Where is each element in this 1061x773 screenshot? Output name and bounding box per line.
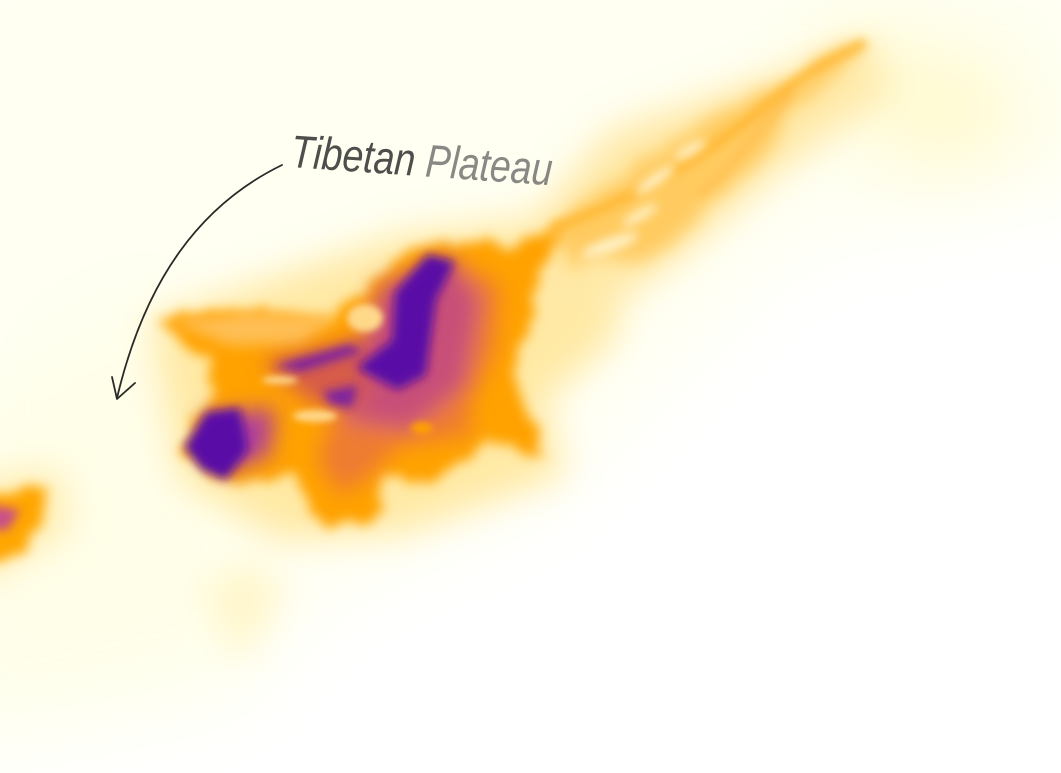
purple high peaks xyxy=(184,254,455,480)
magenta interior highlands xyxy=(205,256,500,495)
western outlying massif xyxy=(0,482,50,570)
lighter orange north-western slopes xyxy=(170,312,340,345)
north-eastern ridge band xyxy=(555,42,865,270)
light valleys inside the north-eastern ridge xyxy=(579,137,708,262)
orange plateau body xyxy=(155,212,585,530)
arrow pointing to plateau xyxy=(112,165,282,399)
pale basins in the western plateau xyxy=(262,304,433,434)
sharp ridge line xyxy=(555,44,862,228)
label: Tibetan Plateau: Tibetan Plateau xyxy=(289,125,554,195)
yellow halo around plateau xyxy=(0,40,890,665)
